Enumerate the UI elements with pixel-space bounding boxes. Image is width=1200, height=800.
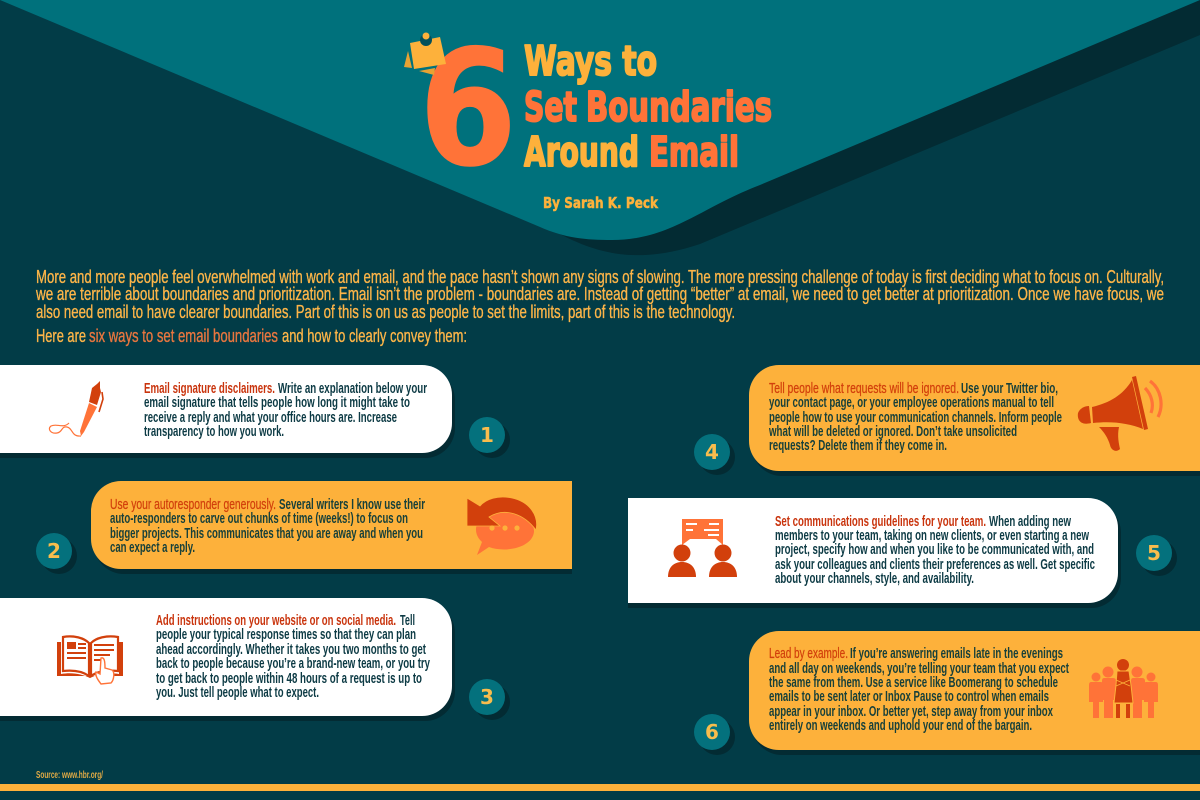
text: tip 3: to get back to people within 48 hours of a request is up to <box>156 671 422 687</box>
icon: reply arrow and chat bubble <box>467 497 537 555</box>
icon: pinned sticky notes <box>404 32 446 75</box>
text: tip 1: Write an explanation below your <box>278 381 427 397</box>
text: tip 4 <box>768 381 1062 454</box>
title: Email <box>649 128 739 176</box>
text: tip 5: When adding new <box>989 514 1071 530</box>
text: tip 4: requests? Delete them if they come in. <box>769 438 947 454</box>
title: Boundaries <box>586 83 772 131</box>
number badge 2: 2 <box>47 539 61 563</box>
panel: tip 3 website instructions <box>0 598 455 721</box>
text: tip 3: ahead accordingly. Whether it takes you two months to get <box>156 642 426 658</box>
text: tip 5 <box>775 514 1095 587</box>
text: tip 6: appear in your inbox. Or better yet, step away from your inbox <box>769 704 1053 720</box>
text: tip 4: Use your Twitter bio, <box>961 381 1058 397</box>
text: tip 4: people how to use your communication channels. Inform people <box>769 410 1062 426</box>
icon: open book with pointing hand <box>57 636 123 684</box>
intro paragraph: and how to clearly convey them: <box>282 326 467 346</box>
panel: tip 4 ignored requests <box>749 365 1200 476</box>
header envelope shape <box>0 0 1200 255</box>
number badge 4 <box>694 434 735 475</box>
source note: Source: www.hbr.org/ <box>36 770 103 781</box>
text: tip 2: auto-responders to carve out chunks of time (weeks!) to focus on <box>110 511 408 527</box>
icon: megaphone <box>1078 376 1161 451</box>
text: tip 6: entirely on weekends and uphold your end of the bargain. <box>769 718 1032 734</box>
text: tip 3: people your typical response times so that they can plan <box>156 627 416 643</box>
intro paragraph: Here are <box>36 326 86 346</box>
number badge 1 <box>469 417 510 458</box>
number badge 1: 1 <box>480 423 494 447</box>
text: tip 1: email signature that tells people how long it might take to <box>144 395 410 411</box>
text: tip 4: Tell people what requests will be ignored. <box>769 381 959 397</box>
text: tip 2 <box>110 497 425 556</box>
text: tip 1: Email signature disclaimers. <box>144 381 275 397</box>
text: tip 6: emails to be sent later or Inbox Pause to control when emails <box>769 689 1049 705</box>
text: tip 1: transparency to how you work. <box>144 424 284 440</box>
number badge 2 <box>36 533 77 574</box>
text: tip 3: Tell <box>400 613 415 629</box>
panel: tip 5 communications guidelines <box>628 498 1121 608</box>
text: tip 4: your contact page, or your employee operations manual to tell <box>769 395 1054 411</box>
panel: tip 2 autoresponder <box>91 481 572 574</box>
icon: pen <box>49 381 103 436</box>
title: Around <box>524 128 639 176</box>
text: tip 6: Lead by example. <box>769 646 848 662</box>
number badge 6: 6 <box>705 720 719 744</box>
text: tip 3: Add instructions on your website or on social media. <box>156 613 396 629</box>
footer bar <box>0 784 1200 791</box>
number badge 3 <box>469 679 510 720</box>
number badge 6 <box>694 714 735 755</box>
intro paragraph: also need email to have clearer boundaries. Part of this is on us as people to set the limits, part of this is the technology. <box>36 302 735 322</box>
icon: team with leader <box>1089 659 1158 718</box>
panel: tip 6 lead by example <box>749 631 1200 755</box>
icon: two people with speech bubble <box>668 519 737 577</box>
text: tip 5: about your channels, style, and availability. <box>775 571 974 587</box>
title: 6 <box>419 15 517 202</box>
text: tip 1 <box>144 381 427 440</box>
text: tip 6 <box>769 646 1069 734</box>
text: tip 3: back to people because you’re a brand-new team, or you try <box>156 656 430 672</box>
text: tip 2: Several writers I know use their <box>279 497 425 513</box>
panel: tip 1 email signature disclaimers <box>0 365 455 458</box>
text: tip 2: Use your autoresponder generously. <box>110 497 276 513</box>
text: tip 6: If you’re answering emails late in the evenings <box>850 646 1063 662</box>
text: tip 2: can expect a reply. <box>110 540 195 556</box>
number badge 5: 5 <box>1147 541 1161 565</box>
title: Ways to <box>524 37 657 85</box>
text: tip 1: receive a reply and what your office hours are. Increase <box>144 410 397 426</box>
title <box>419 15 772 202</box>
number badge 5 <box>1136 535 1177 576</box>
text: tip 5: Set communications guidelines for your team. <box>775 514 986 530</box>
number badge 4: 4 <box>705 440 719 464</box>
intro paragraph: six ways to set email boundaries <box>89 326 278 346</box>
byline: By Sarah K. Peck <box>543 194 659 212</box>
title: Set <box>524 83 577 131</box>
number badge 3: 3 <box>480 685 494 709</box>
text: tip 4: what will be deleted or ignored. Don’t take unsolicited <box>768 424 1017 440</box>
text: tip 3 <box>156 613 430 701</box>
text: tip 6: the same from them. Use a service like Boomerang to schedule <box>769 675 1058 691</box>
text: tip 2: bigger projects. This communicates that you are away and when you <box>110 526 423 542</box>
intro paragraph <box>35 267 1164 346</box>
text: tip 3: you. Just tell people what to expect. <box>156 685 319 701</box>
